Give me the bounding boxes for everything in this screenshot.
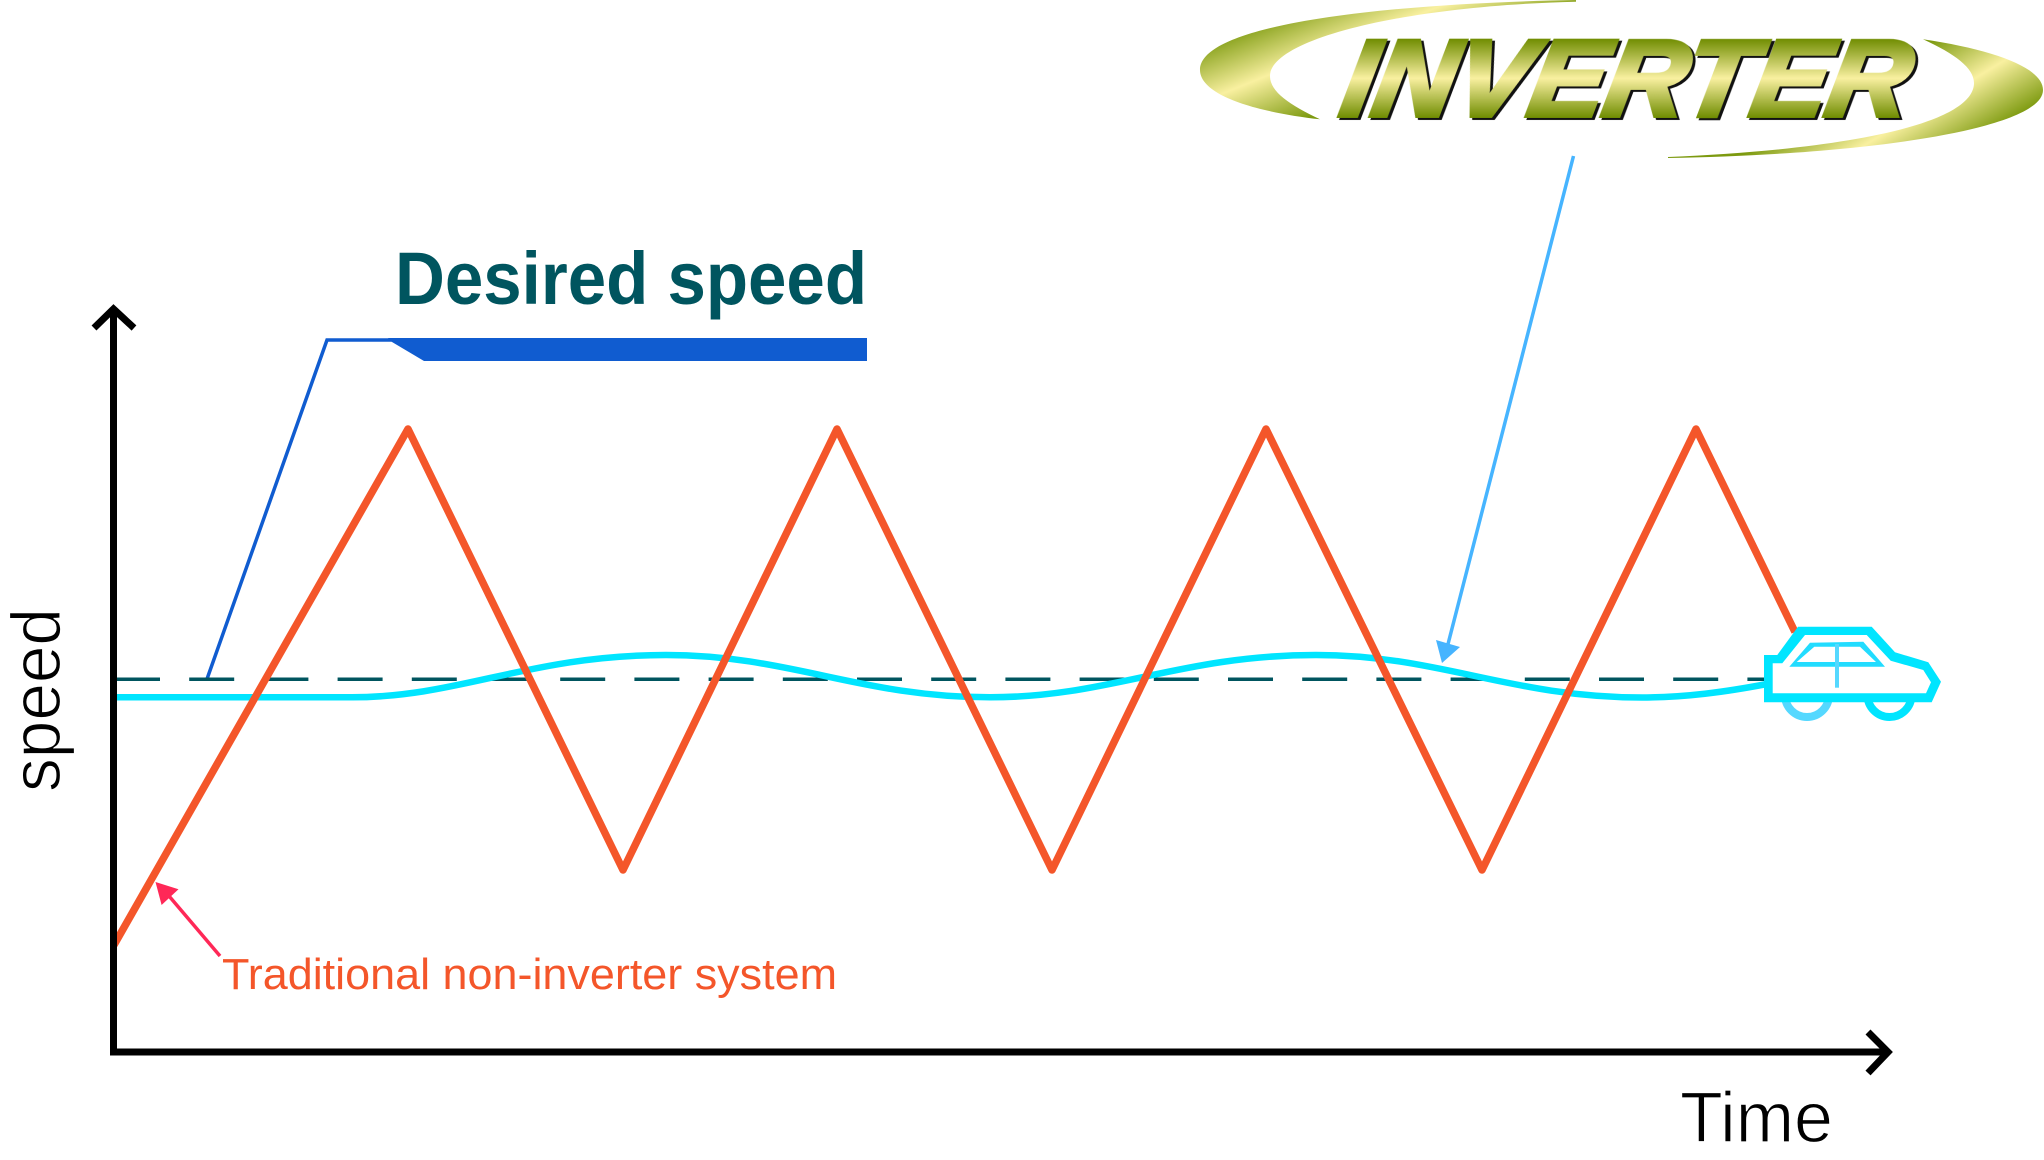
axes	[94, 309, 1888, 1073]
icon: car	[1764, 627, 1941, 717]
INVERTER logo	[1200, 0, 2043, 158]
car door line	[1835, 644, 1839, 688]
arrow to traditional line	[156, 882, 220, 956]
car window	[1789, 642, 1885, 667]
car body	[1764, 627, 1941, 702]
logo left swoosh	[1200, 0, 1576, 119]
traditional non-inverter speed line	[114, 429, 1795, 945]
desired speed callout bar	[207, 338, 867, 679]
logo right swoosh	[1668, 39, 2043, 158]
x axis arrow	[110, 1032, 1888, 1073]
traditional system label: Traditional non-inverter system	[222, 950, 837, 999]
logo wordmark: INVERTER	[1334, 18, 1921, 139]
right wheel	[1868, 673, 1912, 717]
desired speed dashed line	[115, 678, 1766, 681]
left wheel	[1785, 673, 1829, 717]
arrow to inverter curve	[1436, 156, 1574, 663]
inverter speed curve	[114, 655, 1767, 698]
desired speed heading: Desired speed	[395, 237, 867, 320]
y axis arrow	[94, 309, 134, 1052]
x axis label: Time	[1680, 1079, 1833, 1158]
